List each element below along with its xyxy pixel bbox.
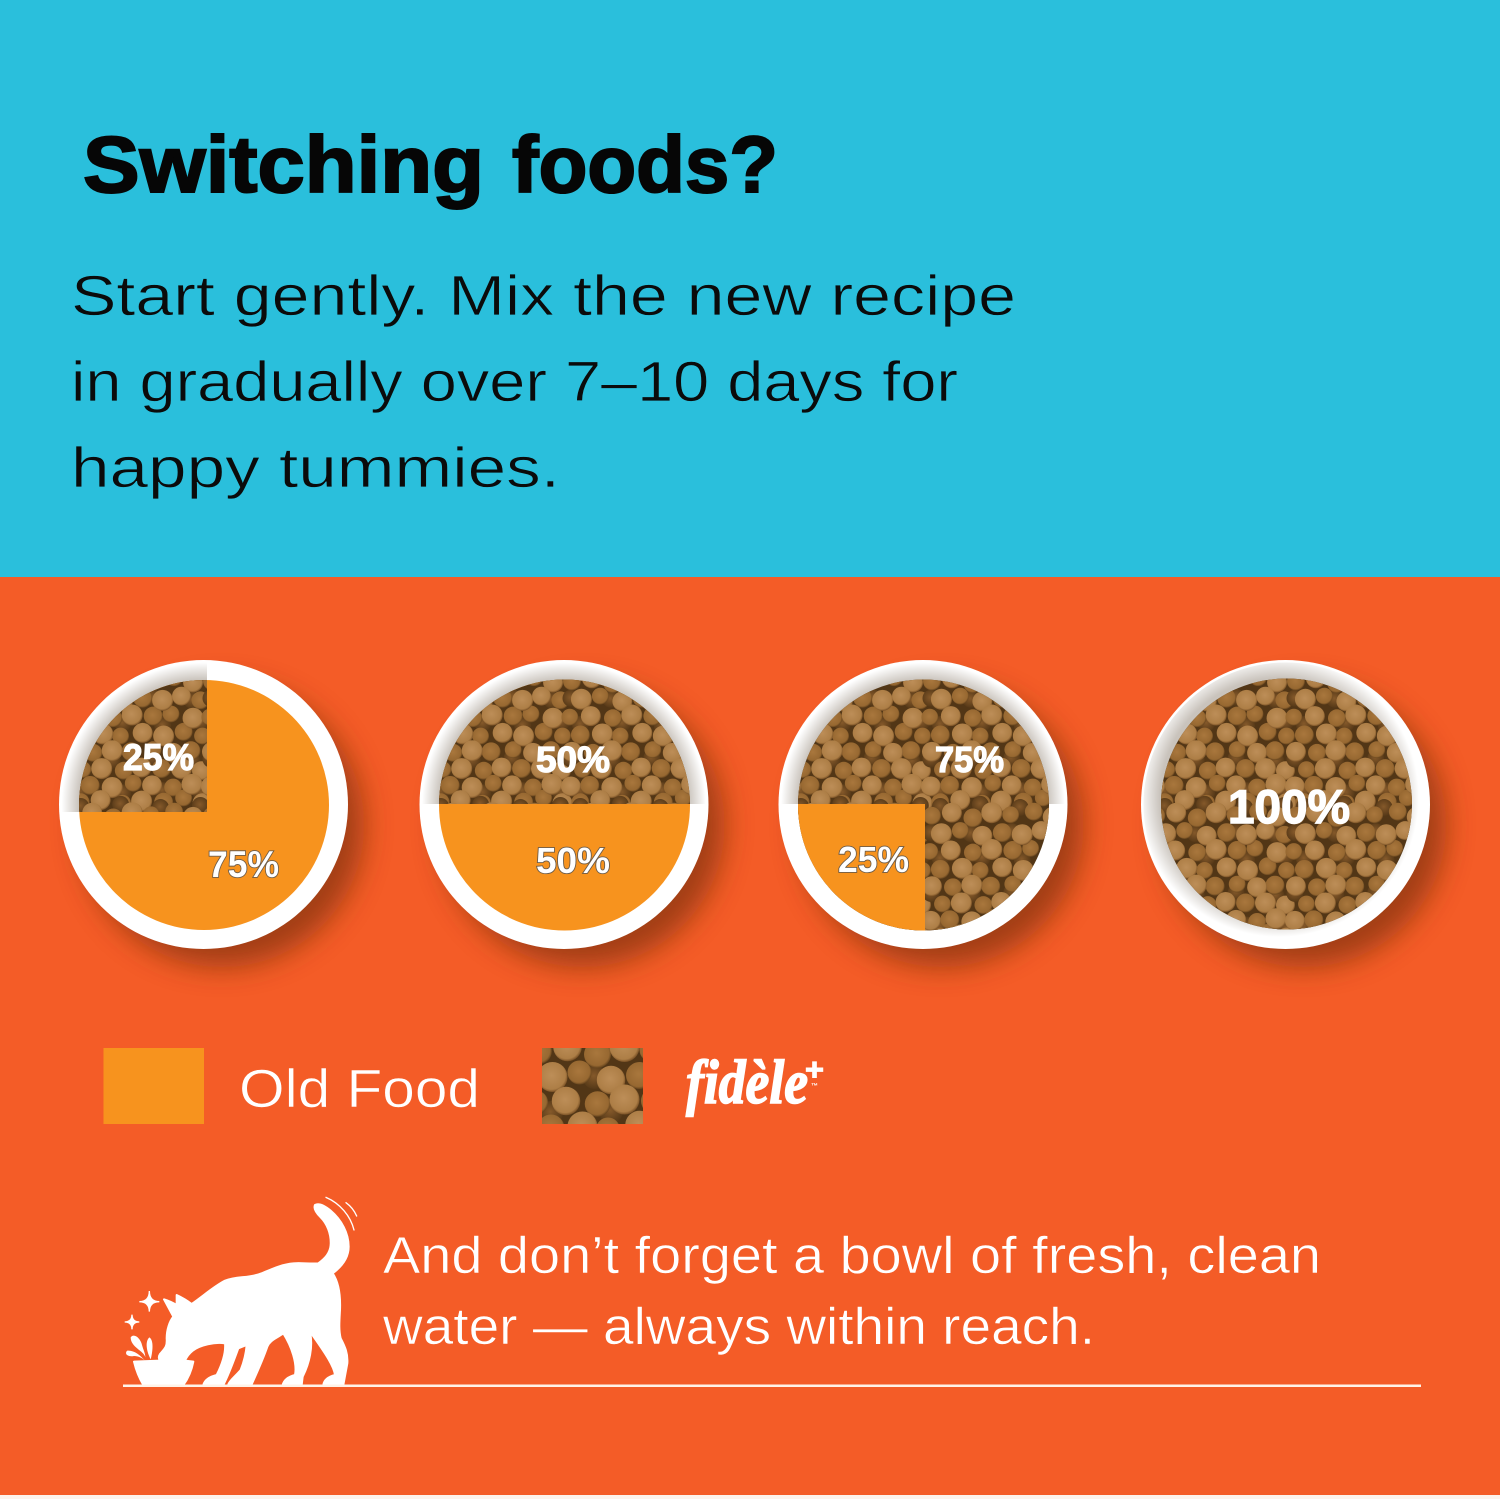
bowl 1: 25% new, 75% old: [59, 660, 381, 984]
splash and sparkles: [125, 1291, 159, 1361]
title: [83, 120, 778, 209]
label: 100%: 100%: [1228, 780, 1350, 833]
bowl 4: 100% new: [1141, 660, 1463, 984]
text block: water reminder: [382, 1227, 1321, 1356]
label: 25%: 25%: [838, 839, 909, 880]
bowl 3: 75% new, 25% old: [778, 660, 1100, 984]
ground line: [123, 1384, 1421, 1387]
logo: fidele plus: +: [805, 1052, 824, 1087]
label: 50% old: 50%: [536, 840, 610, 881]
tail wag lines: [326, 1197, 357, 1230]
legend label: old food: Old Food: [239, 1059, 480, 1119]
bottom pale edge: [0, 1495, 1500, 1499]
icon: dog drinking from bowl: [125, 1197, 357, 1385]
panel: blue header background: [0, 0, 1500, 577]
panel: orange lower background: [0, 577, 1500, 1495]
logo: fidele plus: fidèle: [686, 1049, 808, 1117]
title: foods?: [512, 120, 778, 209]
text block: intro: happy tummies.: [71, 436, 560, 500]
text block: intro: in gradually over 7–10 days for: [71, 350, 958, 414]
label: 75%: 75%: [935, 739, 1004, 780]
title: Switching: [83, 120, 484, 209]
text block: intro: Start gently. Mix the new recipe: [71, 264, 1016, 328]
legend: old food: [104, 1048, 480, 1124]
label: 75%: 75%: [208, 844, 279, 885]
logo: fidele plus: ™: [811, 1083, 818, 1090]
text block: water reminder: And don’t forget a bowl of fresh, clean: [383, 1227, 1321, 1285]
text block: intro: [71, 264, 1016, 500]
bowl 2: 50% new, 50% old: [420, 660, 742, 984]
legend: new food: [542, 1048, 824, 1124]
label: 25%: 25%: [123, 737, 194, 778]
text block: water reminder: water — always within reach.: [382, 1298, 1095, 1356]
label: 50% new: 50%: [536, 739, 610, 780]
